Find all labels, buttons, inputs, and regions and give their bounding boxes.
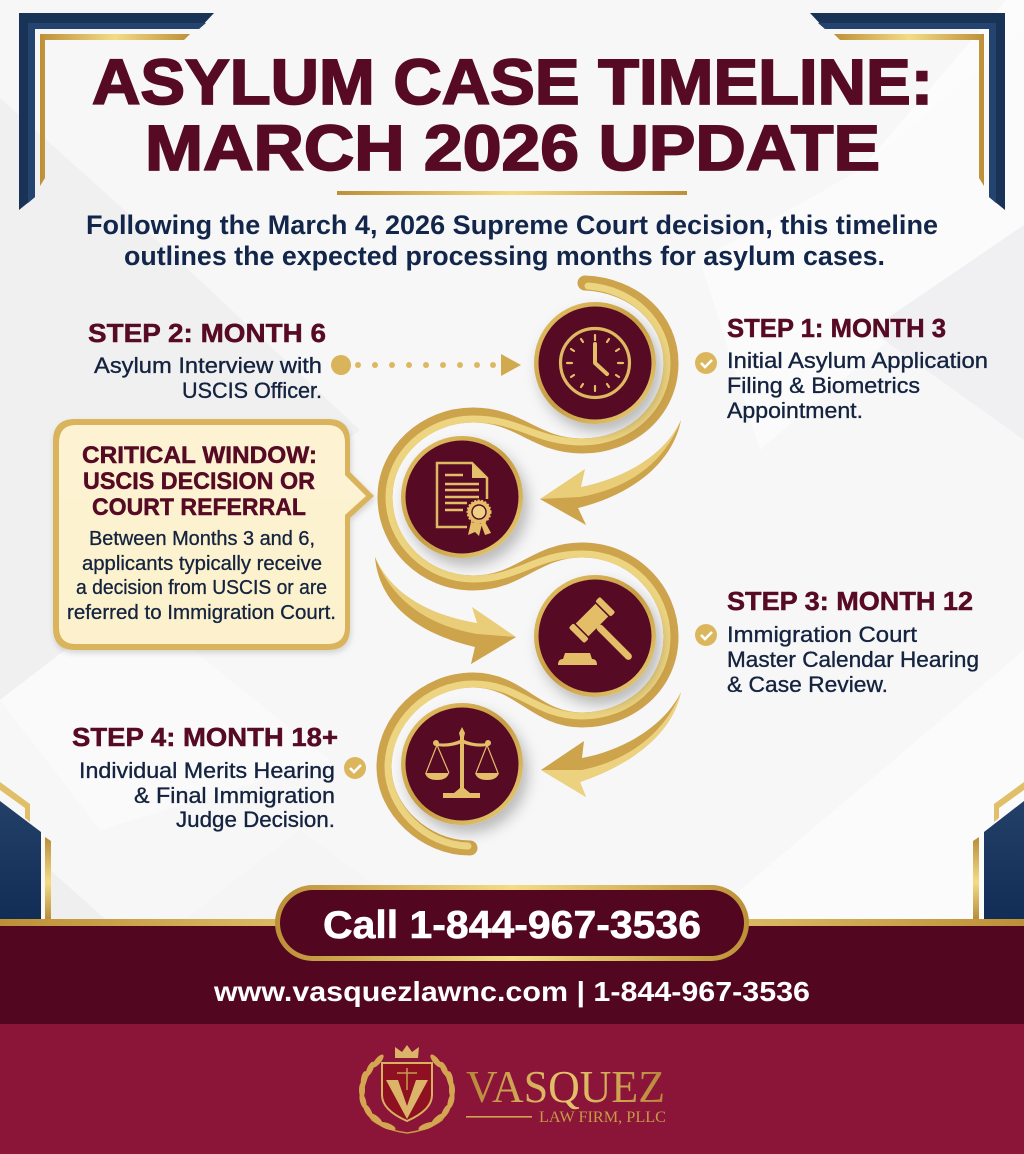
subtitle (86, 210, 938, 271)
icon: clock medallion (534, 302, 656, 424)
callout: critical window: CRITICAL WINDOW: (82, 442, 317, 469)
step 1 heading and text: Appointment. (727, 398, 863, 423)
step 4 heading and text: & Final Immigration (134, 783, 335, 808)
callout: critical window: Between Months 3 and 6, (89, 528, 315, 550)
subtitle: Following the March 4, 2026 Supreme Court decision, this timeline (86, 210, 938, 240)
step 4 check icon (344, 757, 366, 779)
icon: gavel medallion (534, 575, 656, 697)
step 2 heading and text: USCIS Officer. (182, 378, 322, 403)
step 1 heading and text (727, 313, 988, 423)
step 4 heading and text: Individual Merits Hearing (79, 758, 335, 783)
step 4 heading and text: STEP 4: MONTH 18+ (72, 722, 338, 752)
title: MARCH 2026 UPDATE (145, 112, 880, 184)
step 3 check icon (695, 624, 717, 646)
callout: critical window (53, 419, 374, 650)
step 1 heading and text: Initial Asylum Application (727, 348, 988, 373)
step 3 heading and text: & Case Review. (727, 672, 888, 697)
step 2 heading and text (88, 318, 326, 403)
title (92, 46, 933, 184)
step 4 heading and text (72, 722, 338, 832)
step 1 heading and text: Filing & Biometrics (727, 373, 920, 398)
logo: Vasquez Law Firm: LAW FIRM, PLLC (539, 1109, 666, 1126)
step 3 heading and text (727, 586, 979, 697)
step 3 heading and text: STEP 3: MONTH 12 (727, 586, 973, 616)
call button (275, 885, 749, 961)
step 1 check icon (695, 352, 717, 374)
step 3 heading and text: Immigration Court (727, 622, 917, 647)
icon: document medallion (401, 436, 523, 558)
logo: Vasquez Law Firm: VASQUEZ (466, 1061, 665, 1112)
arrow: clock to document (540, 420, 681, 525)
step 3 heading and text: Master Calendar Hearing (727, 647, 979, 672)
callout: critical window: referred to Immigration Court. (67, 602, 336, 624)
icon: scales medallion (401, 703, 523, 825)
subtitle: outlines the expected processing months for asylum cases. (124, 241, 885, 271)
step 1 heading and text: STEP 1: MONTH 3 (727, 313, 946, 343)
callout: critical window: COURT REFERRAL (92, 494, 306, 521)
logo: Vasquez Law Firm (358, 1045, 666, 1133)
contact band (0, 919, 1024, 1024)
website and phone: www.vasquezlawnc.com | 1-844-967-3536 (213, 976, 810, 1007)
callout: critical window: USCIS DECISION OR (83, 468, 315, 495)
logo emblem (358, 1045, 456, 1133)
step 2 heading and text: Asylum Interview with (94, 353, 322, 378)
step 4 heading and text: Judge Decision. (176, 807, 335, 832)
callout: critical window: applicants typically receive (82, 553, 322, 575)
corner frame: bottom left (0, 782, 51, 919)
logo band (0, 1024, 1024, 1154)
dotted arrow from step 2 to clock (331, 354, 521, 376)
corner frame: bottom right (973, 782, 1024, 919)
step 2 heading and text: STEP 2: MONTH 6 (88, 318, 326, 348)
corner frame: top left (19, 13, 214, 210)
serpentine gold ribbon (384, 283, 671, 848)
corner frame: top right (810, 13, 1005, 210)
callout: critical window: a decision from USCIS or are (76, 577, 327, 599)
arrow: document to gavel (375, 557, 516, 664)
title divider (337, 191, 687, 195)
title: ASYLUM CASE TIMELINE: (92, 46, 933, 118)
call button: Call 1-844-967-3536 (323, 904, 701, 947)
arrow: gavel to scales (541, 692, 681, 797)
